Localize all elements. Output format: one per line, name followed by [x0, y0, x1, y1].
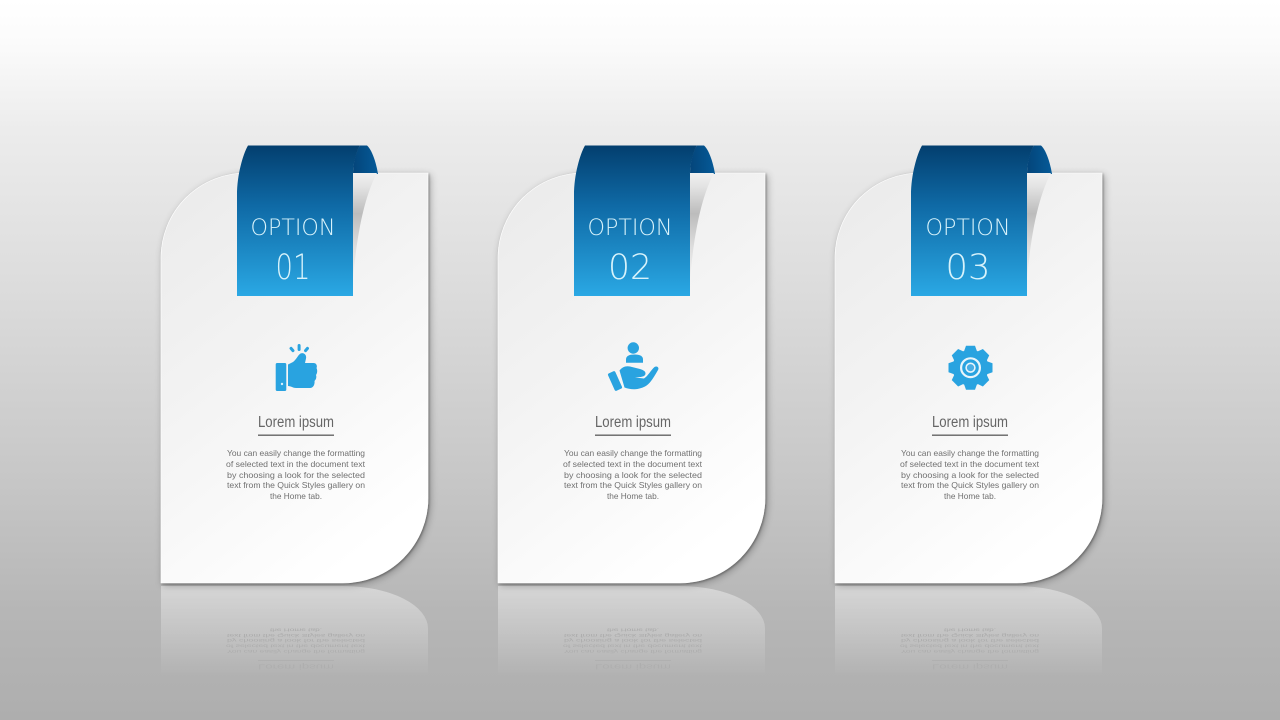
body text: of selected text in the document text [900, 459, 1040, 469]
card paper [835, 173, 1102, 583]
body text [900, 448, 1040, 501]
card paper [498, 173, 765, 583]
ribbon front [574, 146, 697, 296]
ribbon back fold [690, 146, 715, 174]
reflection: card 3 [835, 586, 1102, 652]
option label: OPTION [926, 215, 1010, 241]
reflection: card 3: of selected text in the document text [900, 643, 1039, 648]
reflection: card 1: text from the Quick Styles gallery on [227, 633, 365, 637]
body text: the Home tab. [270, 491, 322, 501]
ribbon front [911, 146, 1034, 296]
reflection: card 2 [498, 586, 765, 652]
heading underline [932, 434, 1008, 436]
body text: by choosing a look for the selected [227, 470, 365, 480]
option number: 01 [276, 248, 310, 288]
body text: You can easily change the formatting [564, 448, 702, 458]
panel: option 03 card [835, 146, 1102, 583]
heading: Lorem ipsum [932, 414, 1008, 431]
reflection: card 3: by choosing a look for the selected [901, 638, 1039, 642]
body text: of selected text in the document text [563, 459, 703, 469]
reflection: card 2: Lorem ipsum [595, 663, 671, 671]
body text: text from the Quick Styles gallery on [564, 480, 702, 490]
paper curl [353, 173, 377, 280]
reflection: card 2: by choosing a look for the selected [564, 638, 702, 642]
reflection: card 1: of selected text in the document text [226, 643, 365, 648]
heading underline [258, 434, 334, 436]
icon: thumbs up [276, 344, 317, 391]
body text: by choosing a look for the selected [564, 470, 702, 480]
reflection: card 1: You can easily change the formatting [227, 649, 365, 653]
body text [226, 448, 366, 501]
body text: by choosing a look for the selected [901, 470, 1039, 480]
card paper [161, 173, 428, 583]
option label: OPTION [588, 215, 672, 241]
reflection: card 1 [161, 586, 428, 652]
reflection: card 3: You can easily change the formatting [901, 649, 1039, 653]
option label: OPTION [250, 215, 336, 241]
reflection: card 1: Lorem ipsum [258, 663, 334, 671]
reflection: card 1: the Home tab. [270, 627, 322, 632]
reflection: card 3: Lorem ipsum [932, 663, 1008, 671]
panel: option 02 card [498, 146, 765, 583]
ribbon back fold [1027, 146, 1052, 174]
heading: Lorem ipsum [595, 414, 671, 431]
body text: of selected text in the document text [226, 459, 366, 469]
body text: You can easily change the formatting [901, 448, 1039, 458]
reflection: card 3: the Home tab. [944, 627, 996, 632]
paper curl [690, 173, 714, 280]
body text: the Home tab. [944, 491, 996, 501]
ribbon back fold [353, 146, 378, 174]
heading underline [595, 434, 671, 436]
reflection: card 2: You can easily change the formatting [564, 649, 702, 653]
option number: 03 [946, 248, 990, 288]
option number: 02 [608, 248, 652, 288]
icon: gear [948, 346, 992, 390]
reflection: card 2: the Home tab. [607, 627, 659, 632]
reflection: card 2: text from the Quick Styles gallery on [564, 633, 702, 637]
reflection: card 2: of selected text in the document text [563, 643, 702, 648]
panel: option 01 card [161, 146, 428, 583]
reflection: card 3: text from the Quick Styles gallery on [901, 633, 1039, 637]
body text: You can easily change the formatting [227, 448, 365, 458]
icon: hand holding person [607, 342, 658, 391]
paper curl [1027, 173, 1051, 280]
body text: text from the Quick Styles gallery on [227, 480, 365, 490]
body text: text from the Quick Styles gallery on [901, 480, 1039, 490]
body text: the Home tab. [607, 491, 659, 501]
ribbon front [237, 146, 360, 296]
body text [563, 448, 703, 501]
reflection: card 1: by choosing a look for the selected [227, 638, 365, 642]
heading: Lorem ipsum [258, 414, 334, 431]
